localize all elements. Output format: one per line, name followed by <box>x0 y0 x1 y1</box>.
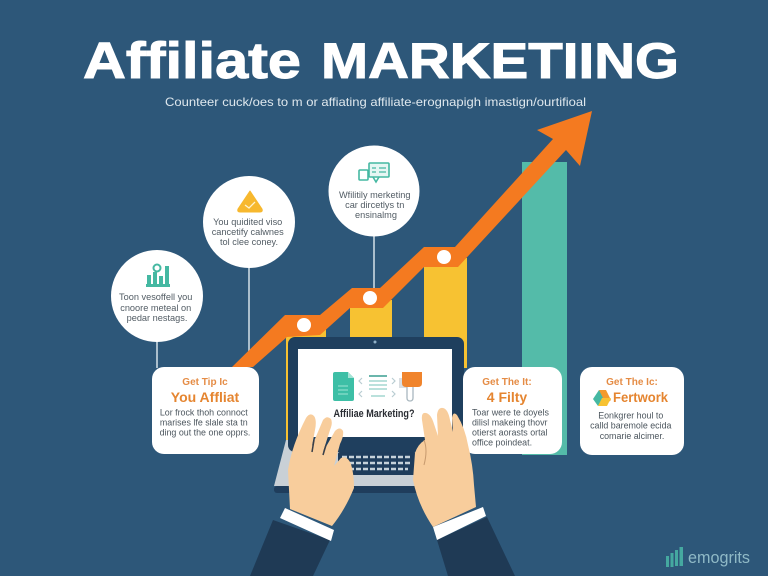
screen caption: Affiliae Marketing? <box>334 408 414 420</box>
card: you affiliate: You Affliat <box>171 389 240 405</box>
circle callout: top: car dircetlys tn <box>345 200 404 210</box>
card: fertwork: Get The Ic: <box>606 377 658 388</box>
circle callout: top: ensinalmg <box>355 210 397 220</box>
icon: chat bubbles <box>359 163 389 182</box>
laptop base <box>274 440 472 486</box>
logo: emogrits <box>666 547 750 567</box>
icon: tri-colour diamond <box>593 390 611 406</box>
keyboard <box>338 452 416 475</box>
left hand and sleeve <box>250 414 354 576</box>
card: you affiliate: Lor frock thoh connoct <box>160 408 248 418</box>
subtitle: Counteer cuck/oes to m or affiating affiliate-erognapigh imastign/ourtifioal <box>165 95 586 109</box>
laptop <box>274 337 472 493</box>
icon: teal bars <box>146 264 170 287</box>
card: fertwork: calld baremole ecida <box>590 420 672 430</box>
card: 4 filty: office poindeat. <box>472 438 532 448</box>
connector lines <box>157 235 374 368</box>
growth arrow <box>232 111 592 367</box>
card: 4 filty: Get The It: <box>482 377 532 388</box>
card: 4 filty: Toar were te doyels <box>472 408 550 418</box>
circle callout: middle: cancetify calwnes <box>212 227 284 237</box>
card: you affiliate: marises lfe slale sta tn <box>160 418 248 428</box>
icon: document <box>333 372 354 401</box>
card: fertwork: comarie alcimer. <box>600 431 664 441</box>
icon: yellow triangle <box>238 191 262 212</box>
card: 4 filty: otierst aorasts ortal <box>472 428 547 438</box>
icon: orange clip <box>399 372 422 401</box>
logo: emogrits: emogrits <box>688 548 750 567</box>
bar chart <box>286 162 567 455</box>
title: Affiliate <box>83 32 301 89</box>
title: MARKETIING <box>321 33 679 89</box>
card: you affiliate: Get Tip Ic <box>182 377 228 388</box>
circle callout: top: Wfilitily merketing <box>339 190 410 200</box>
circle callout: left <box>111 250 203 342</box>
circle callout: left: cnoore meteal on <box>120 303 191 313</box>
card: fertwork: Fertwork <box>613 389 668 405</box>
circle callout: left: pedar nestags. <box>127 313 187 323</box>
icon: list with chevrons <box>359 376 395 397</box>
card: fertwork: Eonkgrer houl to <box>598 410 663 420</box>
circle callout: top <box>328 146 420 236</box>
laptop lid <box>288 337 464 452</box>
card: you affiliate <box>152 367 259 454</box>
circle callout: middle <box>203 176 295 268</box>
laptop screen <box>298 349 452 437</box>
circle callout: middle: You quidited viso <box>213 217 282 227</box>
card: you affiliate: ding out the one opprs. <box>160 428 250 438</box>
circle callout: middle: tol clee coney. <box>220 237 278 247</box>
card: fertwork <box>580 367 684 455</box>
card: 4 filty: dilisl makeing thovr <box>472 418 548 428</box>
right hand and sleeve <box>413 408 515 576</box>
card: 4 filty <box>463 367 562 454</box>
title <box>83 32 679 89</box>
card: 4 filty: 4 Filty <box>487 389 527 405</box>
circle callout: left: Toon vesoffell you <box>119 292 192 302</box>
